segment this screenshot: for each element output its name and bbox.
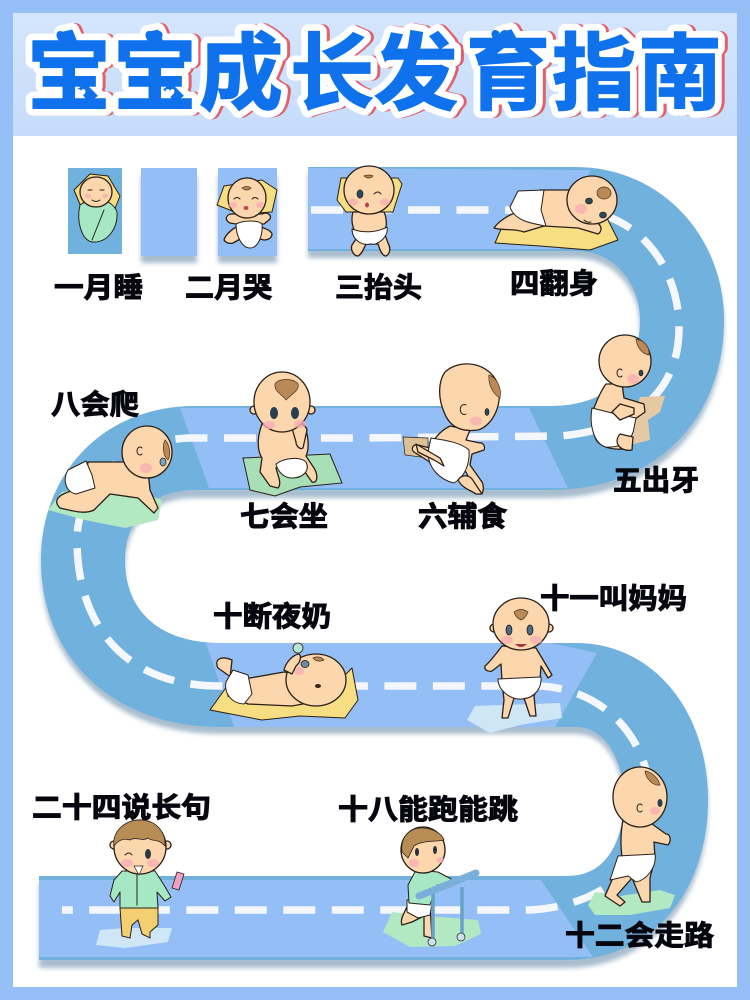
baby 12: running, using a walker — [383, 827, 481, 947]
road: winding curved route — [39, 209, 682, 918]
baby 10: standing, calling mama — [467, 598, 562, 733]
road: third separated block — [218, 168, 277, 263]
baby 7: sitting on mat — [243, 372, 342, 496]
label: 十断夜奶: 十断夜奶 — [213, 601, 331, 632]
toddler: 24 months, talking — [96, 820, 184, 948]
baby 1: swaddled sleeping — [74, 174, 120, 242]
road: second separated block — [141, 168, 197, 263]
label: 六辅食: 六辅食 — [418, 501, 507, 532]
baby 9: lying on mat, no night feed — [210, 643, 358, 720]
baby 2: crying on pillow — [217, 178, 277, 248]
road: first separated block — [68, 168, 122, 254]
baby 11: walking on grass — [588, 767, 675, 915]
baby 5: teething, seated — [591, 335, 665, 450]
label: 八会爬: 八会爬 — [51, 389, 139, 420]
label: 十二会走路: 十二会走路 — [565, 920, 714, 951]
baby 6: starting solid food — [403, 364, 500, 494]
road shadow — [39, 216, 682, 926]
baby 3: lifting head — [337, 166, 402, 256]
road: straight lighter sections — [39, 168, 597, 957]
label: 五出牙: 五出牙 — [613, 465, 699, 496]
label: 一月睡: 一月睡 — [54, 272, 143, 303]
title banner: 宝宝成长发育指南 — [27, 27, 722, 121]
label: 二月哭: 二月哭 — [185, 272, 272, 303]
label: 二十四说长句: 二十四说长句 — [32, 792, 211, 823]
label: 四翻身: 四翻身 — [510, 268, 598, 299]
title banner: 宝宝成长发育指南 — [30, 27, 725, 121]
baby 8: crawling on mat — [48, 426, 172, 528]
road dashed centre line — [62, 210, 679, 910]
title banner: 宝宝成长发育指南 — [27, 27, 722, 121]
label: 三抬头: 三抬头 — [335, 272, 422, 303]
label: 十一叫妈妈: 十一叫妈妈 — [540, 583, 687, 614]
baby 4: rolling over on mat — [494, 176, 618, 250]
label: 十八能跑能跳: 十八能跑能跳 — [338, 794, 518, 825]
label: 七会坐: 七会坐 — [240, 501, 328, 532]
